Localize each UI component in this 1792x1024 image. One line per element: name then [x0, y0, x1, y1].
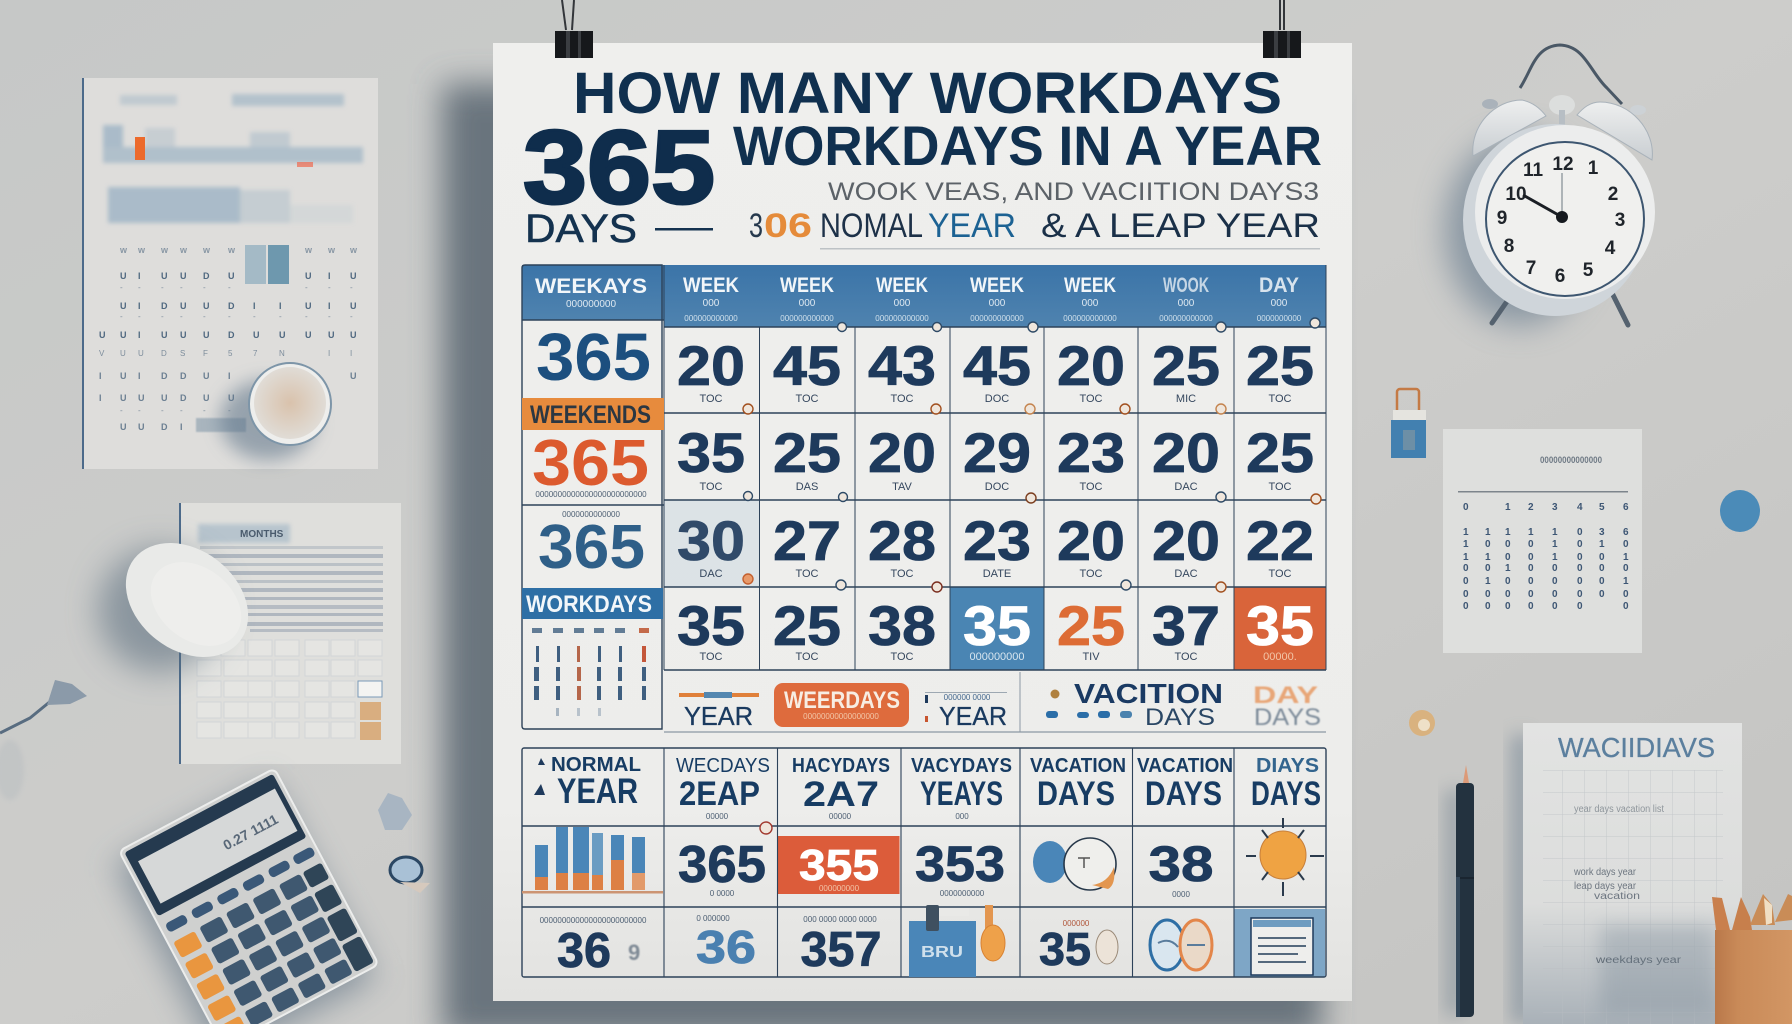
- sheet: vacation days notepad: [1512, 723, 1742, 1024]
- row: bottom numbers: 36: [696, 921, 756, 973]
- icon: alarm clock: [1445, 45, 1655, 325]
- left column: 365 and weekends blocks: 0000000000000000000000000: [535, 490, 647, 499]
- panel: main calendar grid: [522, 265, 1326, 729]
- row: bottom numbers: 36: [557, 924, 611, 978]
- panel: week header row: 000000000000: [1159, 314, 1213, 323]
- sheet: vacation days notepad: vacation: [1594, 891, 1640, 902]
- title: [573, 61, 1322, 177]
- row 3 numbers: 23: [963, 509, 1031, 572]
- row: headings: 00000: [829, 812, 852, 821]
- clip: left binder: [555, 0, 593, 58]
- row: bottom numbers: [540, 914, 1118, 978]
- legend: days faded: DAY: [1253, 682, 1318, 709]
- row 4 numbers: 25: [773, 594, 841, 657]
- sheet: left calendar page: UIUUDUUIU: [120, 271, 356, 281]
- row 1 numbers: TOC: [1268, 393, 1292, 405]
- sheet: right calendar page: 0000000: [1463, 601, 1629, 612]
- row 2 numbers: DAS: [796, 481, 818, 493]
- row: headings: DIAYS: [1256, 755, 1319, 777]
- row 1 numbers: [677, 334, 1314, 405]
- grid lines: [522, 265, 1326, 729]
- legend: vacation days: [1046, 678, 1223, 731]
- row 2 numbers: 20: [1152, 421, 1220, 484]
- panel: week header row: 000000000000: [875, 314, 929, 323]
- icon: computer mouse: [98, 519, 271, 681]
- row 2 numbers: DOC: [985, 481, 1009, 493]
- legend: weekdays pill: 00000000000000000: [803, 712, 879, 721]
- row: headings: YEAR: [557, 772, 638, 811]
- row 2 numbers: 35: [677, 421, 745, 484]
- row 3 numbers: DATE: [983, 568, 1011, 580]
- panel: bottom table: [522, 748, 1326, 978]
- panel: week header row: 000000000000: [780, 314, 834, 323]
- panel: week header row: WEEK: [970, 274, 1024, 297]
- legend: weekdays pill: WEERDAYS: [784, 687, 900, 714]
- sheet: left calendar page: wwwwwwwww: [119, 245, 358, 255]
- legend: year with small marker: YEAR: [939, 701, 1007, 731]
- row 1 numbers: MIC: [1176, 393, 1196, 405]
- chart: blue and orange bars: [522, 827, 663, 894]
- icon: blue and white faces: [1033, 838, 1116, 890]
- row 4 numbers: TOC: [795, 651, 819, 663]
- subtitle: NOMAL: [820, 207, 923, 245]
- icon: orange pencil box: [1712, 894, 1792, 1024]
- panel: week header row: 000000000: [566, 299, 616, 310]
- sheet: left calendar page: IUIDDUIU: [99, 371, 356, 381]
- panel: week header row: 000: [989, 298, 1006, 309]
- row 4 numbers: 000000000: [969, 651, 1025, 663]
- icon: alarm clock: 6: [1555, 266, 1565, 287]
- icon: calculator: 0.27 1111: [220, 811, 281, 853]
- icon: pen: [1446, 765, 1474, 1017]
- row 3 numbers: DAC: [699, 568, 723, 580]
- row 4 numbers: TOC: [890, 651, 914, 663]
- icon: document on blue: [1251, 918, 1313, 975]
- sheet: left calendar page: IUUUDUU: [99, 393, 234, 403]
- row 3 numbers: 28: [868, 509, 936, 572]
- legend: vacation days: VACITION: [1074, 678, 1223, 709]
- highlight cells: blue and orange: [664, 500, 1326, 670]
- icon: blue and orange circles: [1150, 920, 1212, 970]
- row: headings: VACYDAYS: [911, 755, 1012, 777]
- row 2 numbers: 23: [1057, 421, 1125, 484]
- row: headings: 000: [955, 812, 969, 821]
- sheet: left calendar page: ------: [120, 406, 231, 415]
- row 4 numbers: TOC: [1174, 651, 1198, 663]
- row 2 numbers: 20: [868, 421, 936, 484]
- legend: days faded: [1253, 682, 1321, 731]
- icon: blue sharpener: [1391, 389, 1426, 458]
- row: bottom numbers: 000000: [1063, 919, 1090, 928]
- icon: alarm clock: 5: [1583, 260, 1594, 281]
- sheet: left calendar page: -----------: [120, 312, 353, 321]
- row 3 numbers: 20: [1152, 509, 1220, 572]
- sheet: right calendar page: 0123456: [1463, 502, 1629, 513]
- row 2 numbers: 29: [963, 421, 1031, 484]
- poster shadow: [442, 84, 1322, 1024]
- row 4 numbers: 00000.: [1263, 651, 1297, 663]
- panel: week header row: WEEKAYS: [535, 275, 647, 298]
- subtitle: YEAR: [928, 207, 1016, 245]
- icon: blue pebble: [1720, 490, 1760, 532]
- row: headings: DAYS: [1145, 775, 1222, 813]
- left column: 365 and weekends blocks: 365: [538, 513, 645, 582]
- sheet: left lower calendar page: [179, 503, 401, 764]
- row 2 numbers: TOC: [699, 481, 723, 493]
- row 1 numbers: 20: [677, 334, 745, 397]
- legend: year with color band: YEAR: [684, 701, 753, 731]
- icon: small glass object: [390, 857, 430, 893]
- row: bottom numbers: 35: [1039, 923, 1091, 975]
- icon: sun: [1246, 818, 1324, 896]
- icon: alarm clock: 7: [1526, 258, 1536, 279]
- row: bottom numbers: 000000000000000000000000: [540, 916, 647, 925]
- row 3 numbers: TOC: [1268, 568, 1292, 580]
- panel: week header row: 000000000000: [970, 314, 1024, 323]
- panel: week header row: 000: [894, 298, 911, 309]
- row: headings: VACATION: [1137, 755, 1233, 777]
- left column: 365 and weekends blocks: WEEKENDS: [530, 401, 651, 429]
- icon: alarm clock: 11: [1523, 160, 1543, 181]
- row 2 numbers: [677, 421, 1314, 493]
- row: headings: WECDAYS: [676, 755, 770, 777]
- row 1 numbers: TOC: [699, 393, 723, 405]
- panel: week header row: 000000000000: [1063, 314, 1117, 323]
- panel: week header row: WEEK: [683, 274, 739, 297]
- subtitle: 06: [764, 207, 812, 245]
- sheet: vacation days notepad: year days vacation list: [1574, 804, 1664, 815]
- row: headings: 00000: [706, 812, 729, 821]
- row: headings: DAYS: [1251, 775, 1321, 813]
- panel: week header row: 000: [1082, 298, 1099, 309]
- row: middle numbers: 353: [915, 836, 1005, 892]
- row: headings: HACYDAYS: [792, 755, 890, 777]
- left column: 365 and weekends blocks: 0000000000000: [562, 510, 620, 519]
- icon: alarm clock: 2: [1608, 184, 1618, 205]
- panel: week header row: DAY: [1259, 274, 1299, 297]
- row 4 numbers: 35: [677, 594, 745, 657]
- sheet: right calendar page: 11001001: [1463, 552, 1629, 563]
- row 2 numbers: 25: [773, 421, 841, 484]
- icon: alarm clock: 12: [1552, 154, 1574, 175]
- sheet: right calendar page: 00000000: [1463, 589, 1629, 600]
- sheet: vacation days notepad: leap days year: [1574, 881, 1637, 892]
- row: middle numbers: 0 0000: [710, 889, 735, 898]
- row: middle numbers: [678, 822, 1214, 899]
- row 3 numbers: DAC: [1174, 568, 1198, 580]
- row 3 numbers: 30: [677, 509, 745, 572]
- subtitle: WOOK VEAS, AND VACIITION DAYS3: [828, 178, 1319, 206]
- row 1 numbers: 43: [868, 334, 936, 397]
- row 4 numbers: 35: [963, 594, 1031, 657]
- table lines: [522, 748, 1326, 977]
- panel: week header row: [522, 265, 1326, 327]
- row: middle numbers: 0000: [1172, 890, 1190, 899]
- row: middle numbers: 38: [1148, 836, 1214, 892]
- clip: right binder: [1263, 0, 1301, 58]
- icon: calculator: [110, 768, 383, 1024]
- icon: small shell: [1409, 710, 1435, 736]
- row 4 numbers: [677, 594, 1314, 663]
- row 2 numbers: TOC: [1079, 481, 1103, 493]
- row 1 numbers: 25: [1152, 334, 1220, 397]
- date markers at grid intersections: [743, 318, 1321, 592]
- panel: week header row: 000: [1178, 298, 1195, 309]
- title: WORKDAYS IN A YEAR: [733, 114, 1322, 177]
- subtitle: 3: [749, 207, 763, 245]
- icon: alarm clock: 1: [1588, 158, 1599, 179]
- row: headings: 2EAP: [679, 775, 760, 813]
- subtitle: [749, 178, 1320, 250]
- row: middle numbers: 0000000000: [940, 889, 985, 898]
- subtitle: & A LEAP YEAR: [1041, 207, 1320, 245]
- icon: blue briefcase with medal: BRU: [921, 944, 963, 961]
- panel: week header row: WEEK: [876, 274, 928, 297]
- row: headings: DAYS: [1037, 775, 1115, 813]
- row 1 numbers: DOC: [985, 393, 1009, 405]
- sheet: left calendar page: VUUDSF57NII: [99, 349, 352, 358]
- sheet: right calendar page: 01000001: [1463, 576, 1629, 587]
- row 1 numbers: TOC: [1079, 393, 1103, 405]
- sheet: left calendar page: UIDUUDIIUIU: [120, 301, 356, 311]
- sheet: right calendar page: 00000000000000: [1540, 455, 1602, 465]
- panel: legend strip: [664, 672, 1326, 732]
- row 1 numbers: 45: [963, 334, 1031, 397]
- panel: week header row: 000: [703, 298, 720, 309]
- row: headings: NORMAL: [551, 754, 641, 776]
- row 3 numbers: 20: [1057, 509, 1125, 572]
- sheet: left calendar page: UUDI: [120, 422, 183, 432]
- row 1 numbers: TOC: [795, 393, 819, 405]
- big number: 365 days: 365: [523, 110, 715, 226]
- left column: 365 and weekends blocks: 365: [532, 426, 649, 499]
- row: headings: YEAYS: [920, 775, 1003, 813]
- row: headings: [534, 754, 1321, 821]
- legend: year with small marker: [925, 692, 1007, 731]
- sheet: vacation days notepad: WACIIDIAVS: [1558, 732, 1715, 763]
- icon: blue briefcase with medal: [909, 905, 1005, 977]
- icon: alarm clock: 8: [1504, 236, 1514, 257]
- panel: week header row: WEEK: [780, 274, 834, 297]
- row: bottom numbers: 357: [800, 923, 882, 977]
- row 2 numbers: DAC: [1174, 481, 1198, 493]
- title: HOW MANY WORKDAYS: [573, 61, 1282, 126]
- row: middle numbers: 000000000: [819, 884, 860, 893]
- icon: paper blob: [378, 793, 412, 830]
- row 4 numbers: 25: [1057, 594, 1125, 657]
- panel: week header row: WEEK: [1064, 274, 1116, 297]
- row 3 numbers: [677, 509, 1314, 580]
- row 3 numbers: TOC: [890, 568, 914, 580]
- sheet: left calendar page: [82, 78, 378, 469]
- row 1 numbers: TOC: [890, 393, 914, 405]
- legend: weekdays pill: [774, 683, 909, 727]
- big number: 365 days: DAYS: [525, 207, 637, 251]
- row: headings: 2A7: [803, 775, 879, 814]
- left column: 365 and weekends blocks: [522, 320, 664, 582]
- row 3 numbers: TOC: [795, 568, 819, 580]
- row 4 numbers: TOC: [699, 651, 723, 663]
- sheet: right calendar page: 10001010: [1463, 539, 1629, 550]
- row 2 numbers: 25: [1246, 421, 1314, 484]
- sheet: left lower calendar page: MONTHS: [240, 529, 284, 540]
- legend: days faded: DAYS: [1254, 704, 1321, 731]
- icon: alarm clock: 9: [1497, 208, 1507, 229]
- row: middle numbers: 355: [799, 841, 879, 890]
- row 4 numbers: TIV: [1082, 651, 1100, 663]
- row 4 numbers: 38: [868, 594, 936, 657]
- panel: week header row: 000: [1271, 298, 1288, 309]
- legend: vacation days: DAYS: [1145, 704, 1215, 731]
- row 4 numbers: 35: [1246, 594, 1314, 657]
- highlight cells: [778, 836, 1325, 977]
- row 1 numbers: 45: [773, 334, 841, 397]
- panel: week header row: 000: [799, 298, 816, 309]
- row: bottom numbers: 9: [628, 940, 640, 965]
- sheet: vacation days notepad: work days year: [1573, 867, 1637, 878]
- left column: 365 and weekends blocks: 365: [536, 320, 651, 395]
- row 2 numbers: TOC: [1268, 481, 1292, 493]
- icon: dried flower: [0, 680, 87, 800]
- left column: workdays block with mini calendar: [522, 588, 663, 716]
- row 4 numbers: 37: [1152, 594, 1220, 657]
- panel: week header row: 000000000000: [684, 314, 738, 323]
- icon: alarm clock: 3: [1615, 210, 1625, 231]
- icon: coffee cup: [220, 363, 331, 460]
- legend: year with color band: [679, 692, 759, 731]
- row 1 numbers: 20: [1057, 334, 1125, 397]
- sheet: left calendar page: ---------: [120, 283, 353, 292]
- row: headings: VACATION: [1030, 755, 1126, 777]
- row: bottom numbers: 000 0000 0000 0000: [803, 915, 877, 924]
- row: bottom numbers: 0 000000: [696, 914, 730, 923]
- sheet: left calendar page: UUIUUUDUUUUU: [99, 330, 356, 340]
- panel: week header row: 0000000000: [1257, 314, 1302, 323]
- icon: alarm clock: 10: [1505, 184, 1527, 205]
- panel: week header row: WOOK: [1163, 274, 1209, 297]
- row 3 numbers: 22: [1246, 509, 1314, 572]
- poster: [493, 43, 1352, 1001]
- row 3 numbers: TOC: [1079, 568, 1103, 580]
- sheet: right calendar page: 00100000: [1463, 563, 1629, 574]
- sheet: right calendar page: [1443, 429, 1642, 653]
- sheet: vacation days notepad: weekdays year: [1595, 955, 1682, 966]
- row 3 numbers: 27: [773, 509, 841, 572]
- icon: alarm clock: 4: [1605, 238, 1616, 259]
- legend: year with small marker: 000000 0000: [944, 693, 991, 702]
- left column: workdays block with mini calendar: WORKDAYS: [526, 591, 652, 618]
- row: middle numbers: 365: [678, 836, 766, 894]
- row 1 numbers: 25: [1246, 334, 1314, 397]
- sheet: right calendar page: 11111036: [1463, 527, 1629, 538]
- row 2 numbers: TAV: [892, 481, 913, 493]
